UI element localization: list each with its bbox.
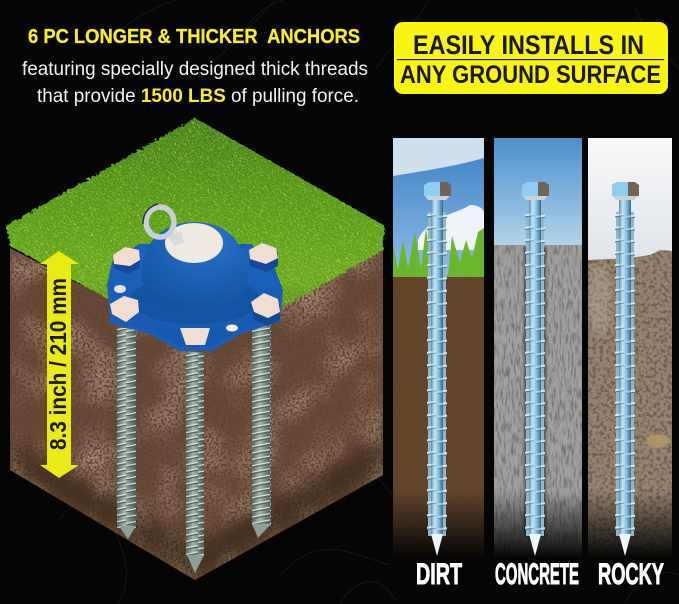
depth arrow	[40, 251, 79, 478]
eye bolt	[143, 204, 184, 246]
bolt sides	[113, 252, 280, 326]
white cap	[165, 223, 223, 263]
label: dirt: DIRT	[416, 558, 462, 591]
depth arrow: 8.3 inch / 210 mm	[45, 278, 71, 450]
panel: concrete	[494, 138, 582, 558]
grass top	[6, 118, 385, 320]
headline: 6 PC LONGER & THICKER ANCHORS	[28, 26, 360, 48]
soil cube illustration	[6, 118, 385, 580]
callout: easily installs	[394, 22, 668, 94]
callout: easily installs: EASILY INSTALLS IN	[413, 30, 644, 60]
screw: rocky	[612, 182, 639, 556]
infographic canvas: CONCRETE	[495, 558, 579, 591]
description line 1: featuring specially designed thick threads	[22, 59, 368, 80]
clouds	[393, 138, 484, 176]
screw: dirt	[424, 182, 451, 556]
dome	[142, 222, 248, 309]
base plate	[109, 246, 281, 349]
blue ground anchor	[109, 204, 281, 349]
panel: dirt	[393, 138, 484, 558]
anchor screw: left	[117, 328, 136, 539]
hex bolts	[110, 243, 280, 345]
rivet holes	[114, 285, 126, 293]
anchor screw: centre	[186, 352, 204, 573]
screw: concrete	[522, 182, 549, 556]
grass blades	[393, 228, 484, 277]
description line 2: that provide 1500 LBS of pulling force.	[37, 86, 359, 107]
soil block	[10, 248, 383, 580]
panel: rocky	[588, 138, 672, 558]
anchor screw: right	[252, 322, 271, 538]
